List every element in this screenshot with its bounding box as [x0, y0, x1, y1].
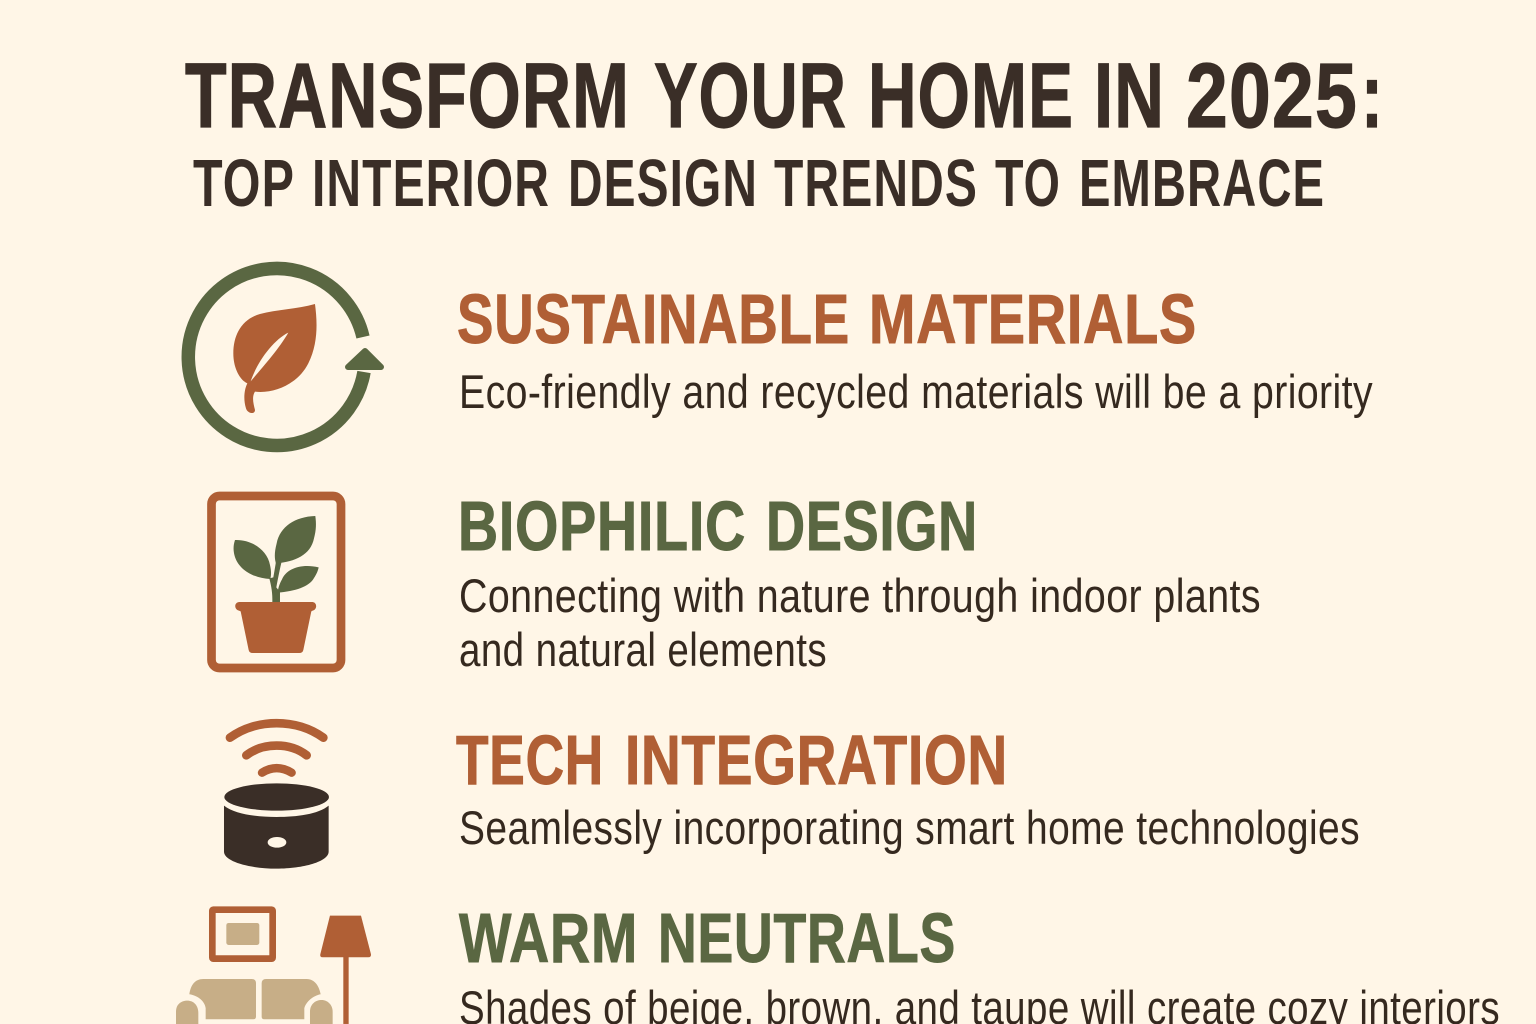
- main heading: YOUR: [654, 45, 847, 147]
- main heading: 2025: [1186, 45, 1358, 147]
- panel: tech integration text: [456, 721, 1360, 854]
- panel: biophilic design text: [458, 487, 1261, 676]
- subtitle: [193, 146, 1325, 221]
- icon: living room with sofa, picture and lamp: [176, 910, 371, 1024]
- main heading: TRANSFORM: [185, 45, 630, 147]
- description: biophilic design: [459, 569, 1261, 676]
- subtitle: TOP: [193, 146, 295, 221]
- heading: sustainable materials: MATERIALS: [869, 280, 1197, 358]
- main heading: [185, 45, 1384, 147]
- main heading: IN: [1094, 45, 1165, 147]
- main heading: HOME: [868, 45, 1074, 147]
- panel: warm neutrals text: [459, 899, 1500, 1024]
- heading: tech integration: INTEGRATION: [625, 721, 1008, 799]
- heading: sustainable materials: SUSTAINABLE: [457, 280, 850, 358]
- subtitle: TRENDS: [774, 146, 978, 221]
- subtitle: TO: [995, 146, 1061, 221]
- heading: warm neutrals: NEUTRALS: [658, 899, 956, 977]
- heading: warm neutrals: WARM: [459, 899, 638, 977]
- main heading: :: [1361, 45, 1384, 147]
- icon: leaf in recycling ring: [188, 268, 381, 445]
- heading: warm neutrals: [459, 899, 956, 977]
- description: sustainable materials: Eco-friendly and recycled materials will be a priority: [459, 365, 1373, 418]
- subtitle: DESIGN: [568, 146, 758, 221]
- panel: sustainable materials text: [457, 280, 1373, 418]
- heading: tech integration: [456, 721, 1008, 799]
- description: tech integration: Seamlessly incorporating smart home technologies: [459, 801, 1360, 854]
- heading: biophilic design: BIOPHILIC: [458, 487, 746, 565]
- heading: biophilic design: DESIGN: [766, 487, 978, 565]
- subtitle: EMBRACE: [1079, 146, 1325, 221]
- subtitle: INTERIOR: [312, 146, 550, 221]
- description: biophilic design: Connecting with nature through indoor plants: [459, 569, 1261, 622]
- icon: smart speaker with wifi waves: [224, 723, 329, 869]
- heading: biophilic design: [458, 487, 978, 565]
- description: biophilic design: and natural elements: [459, 623, 827, 676]
- title: [185, 45, 1384, 221]
- icon: potted plant in frame: [212, 496, 341, 668]
- heading: sustainable materials: [457, 280, 1197, 358]
- heading: tech integration: TECH: [456, 721, 604, 799]
